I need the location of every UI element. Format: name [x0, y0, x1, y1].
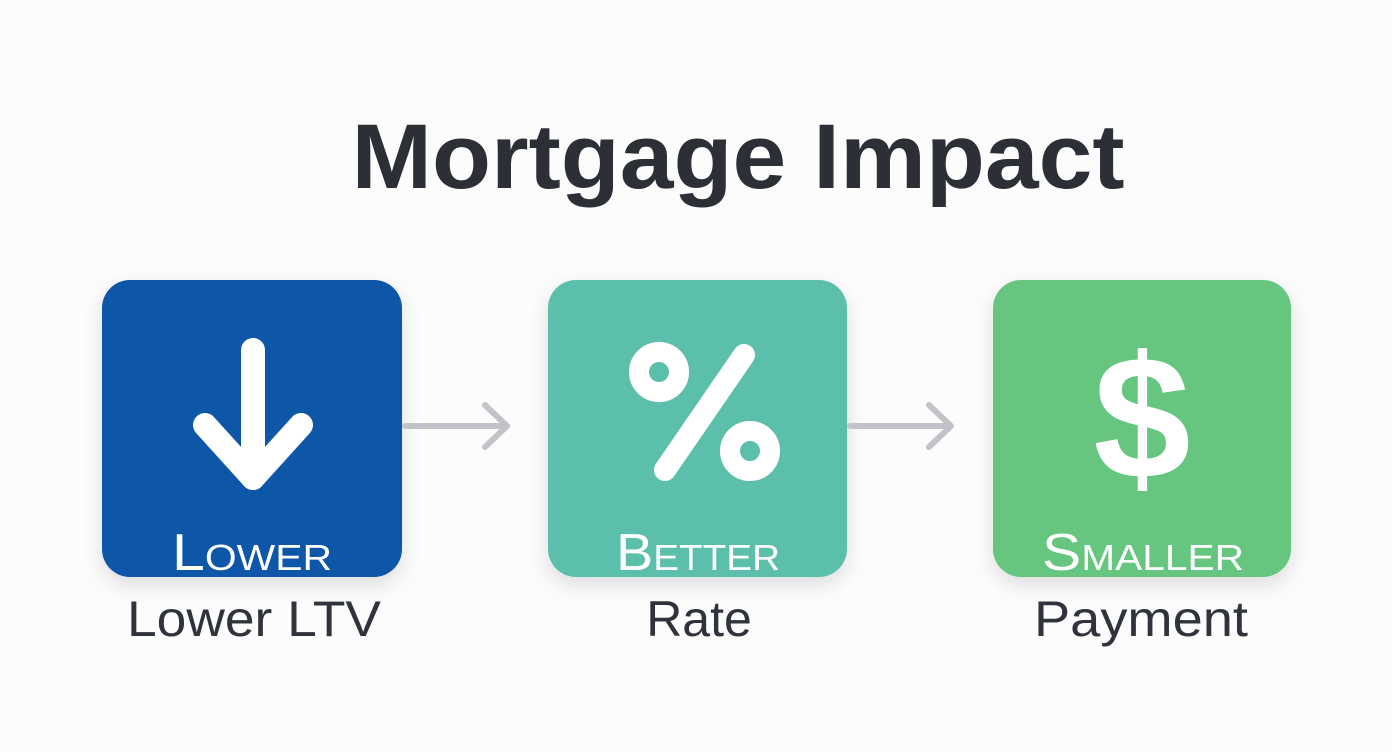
box label: SMALLER: Smaller [1042, 524, 1244, 582]
caption: Payment: Payment [1034, 591, 1248, 647]
caption: Lower LTV: Lower LTV [127, 591, 382, 647]
caption: Rate: Rate [646, 591, 752, 647]
title: Mortgage Impact [352, 106, 1124, 208]
icon: percent [639, 352, 770, 471]
box label: LOWER: Lower [172, 524, 332, 582]
arrow 1 [405, 405, 507, 447]
arrow 2 [850, 405, 951, 447]
panel: smaller payment [993, 280, 1291, 582]
panel: better rate [548, 280, 847, 582]
panel: lower LTV [102, 280, 402, 582]
box label: BETTER: Better [616, 524, 780, 582]
icon: dollar: $ [1093, 321, 1191, 516]
icon: down arrow [205, 350, 301, 478]
